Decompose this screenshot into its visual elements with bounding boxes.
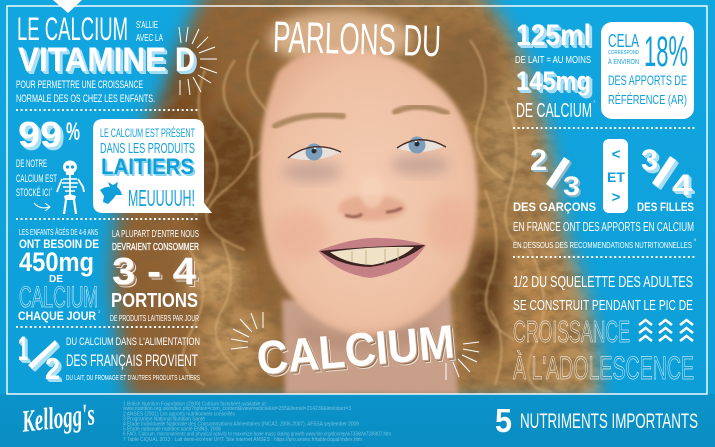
- footnotes: 7 Table CIQUAL 2013 : Lait demi-écrémé UHT. Site internet ANSES : https://pro.anses.fr/tableciqual/index.htm: [123, 437, 362, 443]
- block: 3-4 portions: PORTIONS: [111, 290, 198, 312]
- neck: [282, 290, 458, 394]
- footnotes: 2 ANSES (2001) Les apports nutritionnels conseillés: [123, 412, 235, 418]
- stat: girls fraction: 4: [672, 169, 692, 202]
- stat: 99 percent: STOCKÉ ICI: [16, 186, 50, 199]
- title: parlons du: PARLONS DU: [272, 13, 442, 66]
- block: half of dietary calcium: DU CALCIUM DANS L'ALIMENTATION: [66, 336, 200, 348]
- icon: arrow: [34, 203, 50, 211]
- block: children's calcium needs: ONT BESOIN DE: [19, 239, 99, 251]
- block: 125 ml of milk: DE LAIT = AU MOINS: [515, 55, 591, 66]
- block: calcium and vitamin D: S'ALLIE: [136, 19, 158, 31]
- nose: [337, 195, 406, 222]
- footnotes: [123, 402, 391, 443]
- block: skeleton at adolescence: [513, 274, 694, 386]
- left eye: [288, 144, 341, 160]
- block: children's calcium needs: [18, 228, 101, 323]
- card: 18 percent: CELA: [608, 31, 639, 51]
- block: half of dietary calcium: DES FRANÇAIS PROVIENT: [66, 351, 198, 370]
- stat: 99 percent: %: [66, 118, 80, 146]
- card: less and more than ET: ET: [607, 169, 625, 185]
- stat: boys fraction: 2: [530, 144, 547, 177]
- block: skeleton at adolescence: CROISSANCE: [513, 314, 630, 349]
- footnotes: 5 Étude nationale nutrition santé ENNS, 2006: [123, 426, 221, 432]
- block: calcium and vitamin D: AVEC LA: [136, 32, 163, 44]
- card: 18 percent: À ENVIRON: [608, 57, 639, 66]
- icon: rays around calcium: [231, 312, 479, 380]
- block: 3-4 portions: DEVRAIENT CONSOMMER: [112, 242, 199, 253]
- block: 3-4 portions: [110, 229, 199, 323]
- forehead hair blend: [268, 10, 412, 66]
- footnotes: 6 FAO, Calcium, micronutrients and physical activity to maximize bone mass during growth www.fao.org/docrep/w7336t/w7336t07.htm: [123, 432, 391, 438]
- footnotes: 3 Programme National Nutrition Santé: [123, 416, 205, 422]
- block: children's calcium needs: DE: [49, 273, 63, 285]
- block: calcium and vitamin D: VITAMINE: [18, 41, 166, 79]
- stat: girls fraction: [637, 144, 694, 214]
- stat: 99 percent: 1: [50, 186, 53, 191]
- eyebrows: [275, 115, 343, 126]
- photo: smiling child: [90, 0, 620, 400]
- icon: rays around D: [179, 27, 217, 95]
- stat: 99 percent: DE NOTRE: [16, 158, 47, 170]
- block: 125 ml of milk: 7: [593, 99, 596, 104]
- callout: dairy products: [93, 119, 212, 213]
- logo: Kellogg's: Kellogg's: [19, 396, 96, 439]
- block: calcium and vitamin D: POUR PERMETTRE UNE CROISSANCE: [16, 79, 143, 91]
- face: [259, 48, 478, 337]
- callout: dairy products: LE CALCIUM EST PRÉSENT: [100, 127, 195, 140]
- block: 125 ml of milk: 145mg: [516, 66, 591, 96]
- block: calcium and vitamin D: NORMALE DES OS CHEZ LES ENFANTS.: [16, 93, 155, 105]
- footnotes: 1 British Nutrition Foundation (2009) Calcium factsheet available at:: [123, 402, 267, 408]
- callout: dairy products: LAITIERS: [101, 154, 194, 179]
- footer: 5 important nutrients: 5: [495, 402, 512, 439]
- card: less and more than ET: >: [612, 189, 621, 206]
- block: half of dietary calcium: 2: [45, 351, 60, 386]
- mouth: [318, 238, 426, 278]
- hair strands: [183, 40, 552, 392]
- top notch triangle: [53, 0, 82, 13]
- card: less and more than ET: <: [612, 146, 621, 163]
- block: children's calcium needs: CALCIUM: [19, 281, 98, 314]
- footnotes: www.nutrition.org.uk/index.php?option=com_content&view=article&id=255&Itemid=214236&limitstart=3: [123, 406, 351, 412]
- block: 125 ml of milk: DE CALCIUM: [516, 100, 592, 122]
- stat: boys fraction: 3: [563, 171, 580, 201]
- block: calcium and vitamin D: LE CALCIUM: [17, 11, 128, 47]
- chin shadow on neck: [302, 324, 429, 350]
- block: 125 ml of milk: 125ml: [516, 19, 591, 52]
- stat: boys fraction: DES GARÇONS: [513, 200, 596, 214]
- block: children's calcium needs: LES ENFANTS ÂGÉS DE 4-6 ANS: [19, 228, 98, 237]
- card: 18 percent: CORRESPOND: [608, 50, 639, 56]
- text: below recommendations: 5: [694, 237, 697, 242]
- footer: 5 important nutrients: [495, 402, 698, 439]
- footnotes: 4 Étude Individuelle Nationale des Consommations Alimentaires (INCA2, 2006-2007), AFSSA september 2009: [123, 420, 359, 428]
- cheeks: [277, 212, 326, 256]
- block: half of dietary calcium: 1: [18, 330, 28, 368]
- block: 3-4 portions: 3 - 4: [112, 251, 196, 293]
- stat: 99 percent: CALCIUM EST: [16, 173, 57, 185]
- block: children's calcium needs: 450mg: [19, 247, 94, 277]
- text: below recommendations: [513, 219, 697, 250]
- stat: girls fraction: 3: [641, 144, 658, 177]
- icon: growth chevrons: [639, 320, 693, 341]
- icon: cow: [100, 182, 122, 204]
- block: 3-4 portions: LA PLUPART D'ENTRE NOUS: [112, 229, 199, 240]
- callout: dairy products: MEUUUUH!: [128, 185, 195, 211]
- block: children's calcium needs: 2: [98, 309, 101, 314]
- title: calcium: CALCIUM: [254, 314, 456, 385]
- stat: girls fraction: DES FILLES: [637, 200, 694, 214]
- under-eye shadows: [282, 162, 342, 182]
- block: 125 ml of milk: [515, 19, 596, 122]
- block: half of dietary calcium: [18, 330, 200, 386]
- block: calcium and vitamin D: D: [175, 41, 195, 79]
- stat: boys fraction: [513, 144, 596, 214]
- callout: dairy products: DANS LES PRODUITS: [100, 141, 195, 157]
- stat: 99 percent: [16, 114, 80, 211]
- block: 3-4 portions: DE PRODUITS LAITIERS PAR JOUR: [110, 314, 199, 323]
- card: 18 percent: [601, 22, 694, 119]
- icon: skeleton: [57, 160, 84, 214]
- block: calcium and vitamin D: [16, 11, 217, 105]
- card: less and more than ET: [603, 139, 628, 213]
- stat: 99 percent: 99: [18, 114, 62, 155]
- right eye: [397, 136, 446, 154]
- footer band: [0, 394, 715, 447]
- block: half of dietary calcium: DU LAIT, DU FROMAGE ET D'AUTRES PRODUITS LAITIERS: [66, 373, 200, 382]
- block: children's calcium needs: CHAQUE JOUR: [18, 309, 96, 323]
